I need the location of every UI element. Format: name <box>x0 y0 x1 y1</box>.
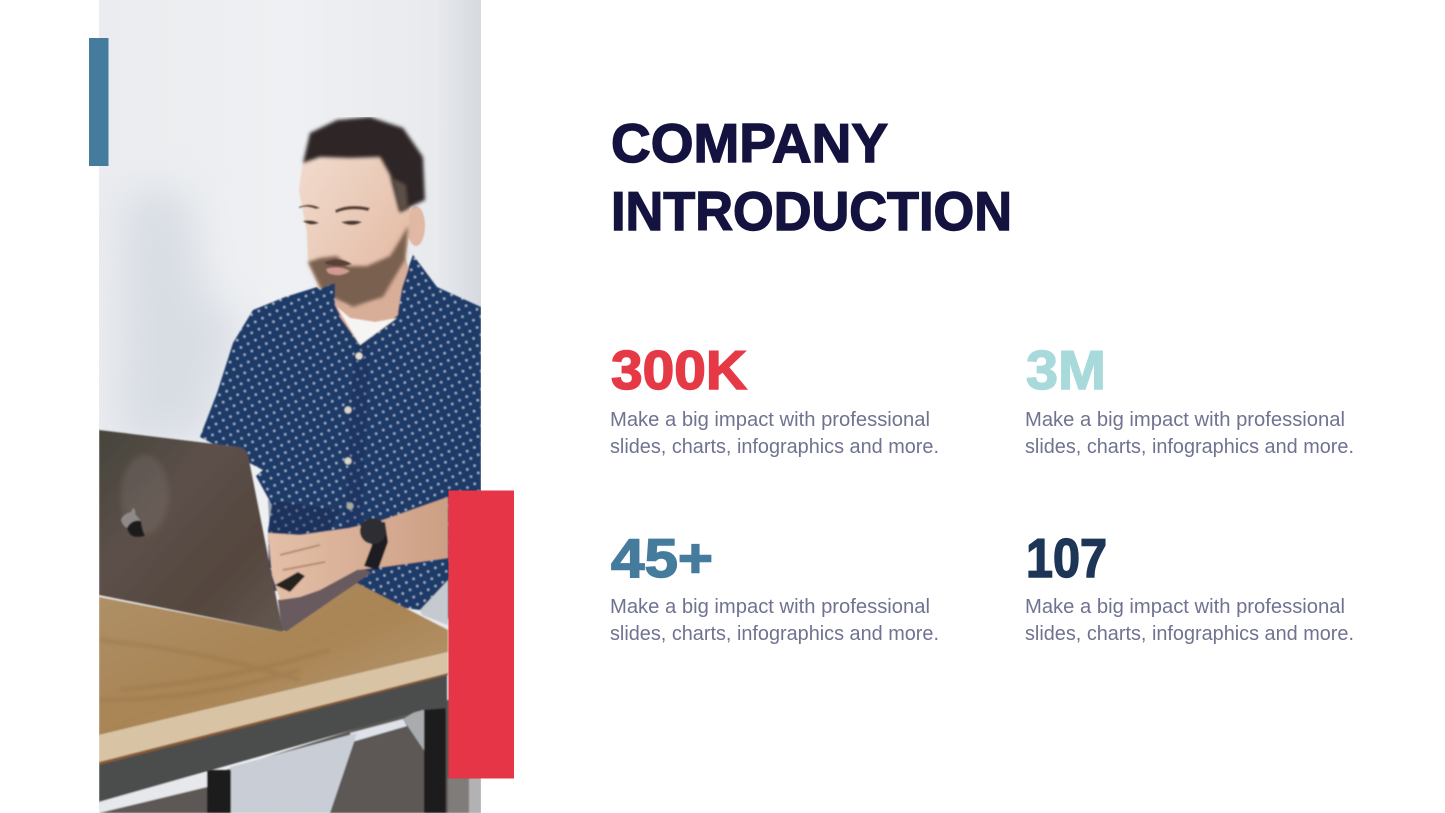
stat: 107: 107 <box>1026 527 1107 589</box>
laptop lid <box>99 430 283 632</box>
stat: 45+ <box>610 527 939 645</box>
stat: 45+: slides, charts, infographics and more. <box>610 623 939 645</box>
wristwatch <box>360 518 388 570</box>
head <box>299 117 425 307</box>
icon: laptop logo <box>121 508 145 537</box>
forearm and hand <box>268 497 448 600</box>
stat: 45+: Make a big impact with professional <box>610 596 930 618</box>
trousers behind arm <box>420 580 448 625</box>
stat: 3M: Make a big impact with professional <box>1025 409 1345 431</box>
stat: 300K: 300K <box>611 339 747 401</box>
photo: man working on a laptop <box>99 0 481 813</box>
stat: 107: Make a big impact with professional <box>1025 596 1345 618</box>
stat: 107 <box>1025 527 1354 645</box>
accent bar: blue <box>89 38 108 166</box>
accent bar: red <box>448 490 514 778</box>
stat: 300K: slides, charts, infographics and more. <box>610 436 939 458</box>
photo subject <box>99 117 481 813</box>
title: INTRODUCTION <box>611 180 1012 242</box>
title: COMPANY <box>611 112 888 174</box>
title <box>611 112 1012 242</box>
photo wall background <box>99 0 481 813</box>
stat: 3M: 3M <box>1026 339 1106 401</box>
shirt <box>200 255 481 620</box>
stat: 3M <box>1025 339 1354 458</box>
neck and t-shirt <box>335 255 413 345</box>
stat: 300K <box>610 339 939 458</box>
cuff under wrist <box>376 568 378 570</box>
collar <box>318 255 414 316</box>
laptop base <box>278 568 371 631</box>
table <box>99 583 448 802</box>
floor and legs <box>99 700 481 813</box>
stat: 300K: Make a big impact with professional <box>610 409 930 431</box>
stat: 107: slides, charts, infographics and more. <box>1025 623 1354 645</box>
stat: 45+: 45+ <box>611 527 713 589</box>
stat: 3M: slides, charts, infographics and more. <box>1025 436 1354 458</box>
